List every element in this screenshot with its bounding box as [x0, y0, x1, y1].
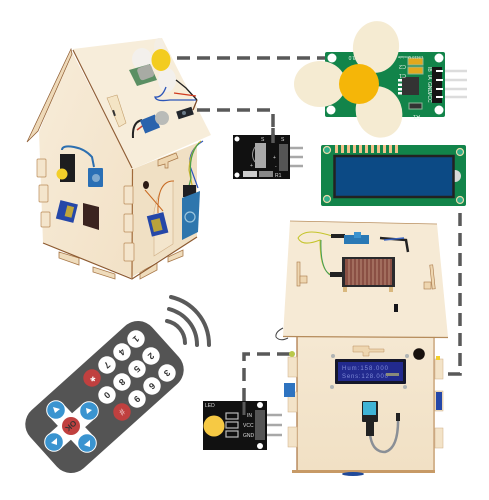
- right wall: [132, 143, 197, 277]
- silkscreen labels: v3.0: [348, 54, 358, 60]
- hub: [339, 64, 379, 104]
- fan module illustration: [294, 17, 467, 144]
- button labels: 2: [146, 351, 156, 361]
- dashed connector: IR receiver: [197, 110, 273, 143]
- dashed connector: LED module: [244, 354, 290, 403]
- window opening: [83, 203, 99, 230]
- LCD on wall: Hum:158.000: [342, 366, 389, 372]
- RFID module with ribbon wires: [182, 141, 203, 240]
- IR receiver module: R1: [275, 173, 282, 179]
- dashed connector: fan: [177, 56, 331, 60]
- roof slot: [107, 95, 126, 127]
- servo, left wall: [56, 200, 78, 223]
- button labels: #: [117, 407, 127, 417]
- IR receiver module: S: [261, 137, 265, 143]
- LED button module, left wall: [56, 146, 94, 182]
- LCD on wall: [330, 354, 409, 389]
- button labels: 6: [147, 381, 157, 391]
- wires on roof: [155, 80, 197, 110]
- roof pegs: [297, 262, 435, 289]
- button labels: 5: [132, 364, 142, 374]
- roof slot: [394, 304, 398, 312]
- petals: [349, 17, 403, 77]
- button labels: 0: [102, 390, 112, 400]
- silkscreen labels: IA: [426, 75, 432, 80]
- side tabs: [37, 159, 134, 261]
- button labels: 8: [117, 377, 127, 387]
- silkscreen labels: C1: [399, 72, 406, 78]
- silkscreen labels: [348, 54, 432, 119]
- IR receiver module: -: [275, 164, 277, 170]
- door outline on right wall: [154, 181, 173, 256]
- silkscreen labels: R1: [413, 113, 420, 119]
- LED module: [203, 401, 282, 450]
- silkscreen labels: IB: [426, 67, 432, 72]
- IR receiver module: [233, 128, 303, 179]
- flame sensor: [133, 111, 169, 138]
- roof panel: [73, 38, 211, 169]
- LED module: VCC: [243, 423, 254, 429]
- IR receiver module: S: [281, 137, 285, 143]
- roof: [283, 221, 448, 337]
- star and hash buttons: [83, 369, 131, 421]
- direction pad: OK: [63, 418, 78, 433]
- side tabs: [288, 357, 443, 448]
- button labels: 4: [117, 347, 127, 357]
- LED module: GND: [243, 433, 254, 439]
- button labels: 7: [102, 360, 112, 370]
- silkscreen labels: C2: [399, 63, 406, 69]
- hole: [413, 348, 425, 360]
- IR receiver module: +: [250, 163, 253, 169]
- button labels: *: [84, 370, 99, 386]
- base edge: [43, 237, 197, 279]
- wooden house, angled view: [27, 38, 211, 279]
- roof-side wooden peg: [158, 153, 178, 168]
- LED module: IN: [247, 413, 252, 419]
- IR receiver module: +: [273, 155, 276, 161]
- LED module: LED: [205, 403, 215, 409]
- chip: [402, 77, 419, 95]
- button module: [176, 107, 194, 119]
- wall: [297, 336, 435, 472]
- copper rain plate: [342, 257, 395, 292]
- LCD on wall: Sens:128.000: [342, 374, 389, 380]
- button labels: 3: [162, 368, 172, 378]
- number buttons: [98, 330, 176, 408]
- dashed connector: LCD: [407, 213, 460, 374]
- DHT sensor: [362, 401, 400, 452]
- infrared remote control: [17, 313, 192, 481]
- pins: [442, 71, 467, 97]
- rain sensor blue board: [344, 232, 369, 244]
- wall peg: [353, 346, 384, 356]
- silkscreen labels: L9110 Module: [397, 55, 423, 60]
- fan on roof: [129, 38, 176, 92]
- direction pad: [45, 401, 98, 452]
- signal waves: [167, 297, 209, 345]
- peeking side components: [284, 383, 295, 397]
- LCD module illustration: [321, 145, 466, 206]
- button labels: 9: [132, 394, 142, 404]
- button labels: [84, 334, 172, 417]
- touch sensor: [88, 168, 103, 187]
- button labels: 1: [131, 334, 141, 344]
- base tabs: [59, 250, 183, 279]
- left wall: [39, 50, 133, 278]
- roof left edge: [27, 49, 72, 142]
- header: [432, 67, 442, 103]
- silkscreen labels: VCC: [426, 92, 432, 103]
- board: [325, 52, 445, 117]
- capacitors: [408, 58, 423, 65]
- remote body: [17, 313, 192, 481]
- base: [292, 470, 435, 473]
- rear view of wooden house: [276, 221, 448, 476]
- rain sensor wiring: [298, 232, 408, 277]
- servo, right wall: [143, 181, 174, 237]
- silkscreen labels: GND: [426, 82, 432, 94]
